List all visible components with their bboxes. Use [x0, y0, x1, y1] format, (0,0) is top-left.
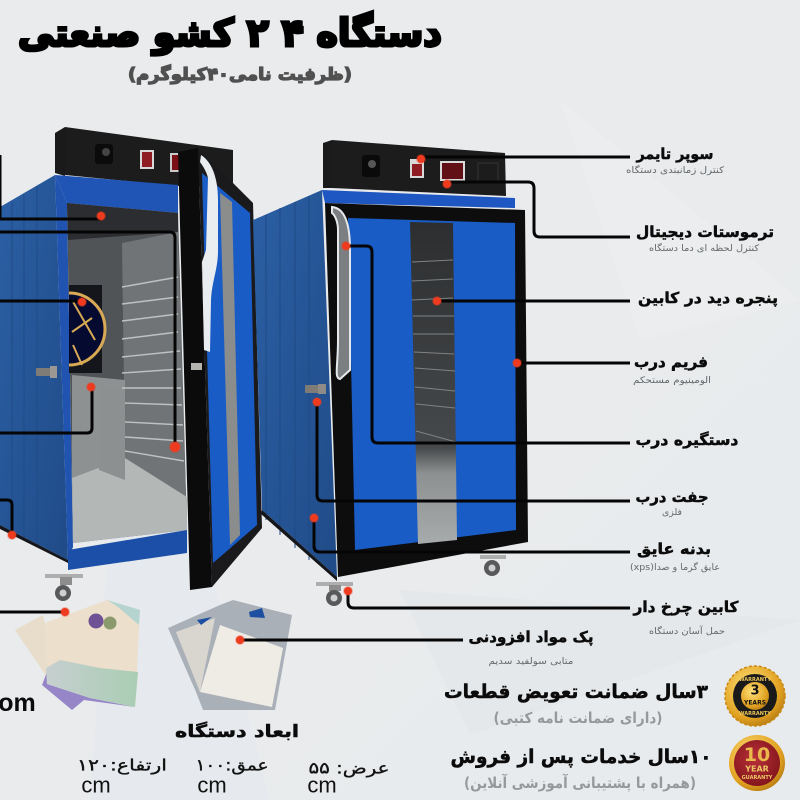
instruction booklets [15, 600, 140, 710]
badge: 3 years warranty: WARRANTY [739, 711, 771, 717]
leader: super timer [417, 155, 630, 163]
right machine: closed door [325, 203, 528, 577]
label: additives pack: پک مواد افزودنی [468, 628, 594, 647]
left machine with open door [0, 127, 262, 601]
label: insulated body [630, 540, 720, 573]
label: door frame: فریم درب [634, 353, 708, 371]
width value: cm [307, 772, 337, 798]
additive chemical sachets [168, 600, 292, 710]
height value: ارتفاع:۱۲۰ [77, 756, 167, 776]
leader: insulated body [310, 514, 630, 552]
right machine: door handle [332, 207, 350, 379]
depth value: cm [197, 772, 227, 798]
warranty text: (دارای ضمانت نامه کتبی) [494, 709, 662, 727]
right machine: blue top strip [322, 190, 515, 208]
depth value: عمق:۱۰۰ [196, 756, 268, 776]
leader: booklets [0, 608, 69, 616]
label: wheeled cabin [632, 598, 739, 637]
left machine: control box [55, 127, 233, 188]
label: wheeled cabin: حمل آسان دستگاه [649, 625, 725, 637]
after-sales service text: (همراه با پشتیبانی آموزشی آنلاین) [464, 774, 696, 793]
right machine: window glass [410, 222, 457, 544]
label: super timer: کنترل زمانبندی دستگاه [626, 164, 725, 176]
height value: cm [81, 772, 111, 798]
title: دستگاه ۲ ۴ کشو صنعتی [18, 11, 442, 55]
left machine: cabin interior [67, 203, 187, 543]
label: digital thermostat [636, 223, 774, 254]
badge: 10 year guaranty [729, 735, 785, 791]
leader: left shelf [0, 383, 95, 433]
right machine: caster wheels [316, 555, 506, 606]
dimensions block [77, 721, 390, 798]
width value: عرض: ۵۵ [308, 758, 390, 778]
label: additives pack [468, 628, 594, 667]
dimensions heading: ابعاد دستگاه [175, 721, 299, 742]
warranty text: ۳سال ضمانت تعویض قطعات [444, 681, 708, 703]
label: door frame [633, 353, 711, 386]
leader: left body [0, 500, 16, 539]
leader: door frame [513, 359, 630, 367]
badge: 3 years warranty [725, 666, 785, 726]
badge: 3 years warranty: YEARS [743, 700, 766, 706]
label: cabin window: پنجره دید در کابین [638, 289, 778, 308]
left machine: open door [178, 148, 262, 590]
badge: 3 years warranty: WARRANTY [739, 677, 771, 683]
leader: cabin window [433, 297, 630, 305]
subtitle: capacity: (ظرفیت نامی۴۰کیلوگرم) [128, 64, 352, 85]
label: door latch: فلزی [662, 508, 682, 518]
label: super timer [626, 145, 725, 176]
label: super timer: سوپر تایمر [636, 145, 714, 164]
left machine: caster wheel [45, 574, 83, 601]
badge: 10 year guaranty: 10 [744, 744, 770, 766]
leader: digital thermostat [443, 180, 630, 237]
label: door frame: الومینیوم مستحکم [633, 376, 711, 386]
leader: wheeled cabin [344, 587, 630, 608]
left machine: side wall [0, 175, 68, 563]
after-sales service text: ۱۰سال خدمات پس از فروش [450, 746, 712, 768]
badge: 10 year guaranty: GUARANTY [742, 775, 773, 781]
leader: door latch [313, 398, 630, 501]
height value [77, 756, 167, 798]
leader: door handle [342, 242, 630, 443]
depth value [196, 756, 268, 798]
label: insulated body: بدنه عایق [637, 540, 711, 558]
leader: left fan [0, 298, 86, 306]
label: door latch [636, 488, 708, 518]
label: door latch: جفت درب [636, 488, 708, 506]
width value [307, 758, 390, 798]
leader lines with marker dots [0, 155, 630, 644]
booklet logo [88, 614, 116, 630]
leader: left door handle [0, 232, 180, 452]
label: insulated body: عایق گرما و صدا(xps) [630, 561, 720, 573]
label: door handle: دستگیره درب [636, 431, 739, 449]
badge: 3 years warranty: 3 [750, 684, 760, 698]
left machine: blue front frame [55, 175, 187, 570]
label: wheeled cabin: کابین چرخ دار [632, 598, 739, 617]
label: digital thermostat: کنترل لحظه ای دما دستگاه [649, 242, 760, 254]
left machine: door handle [200, 155, 218, 352]
leader: left top [0, 155, 105, 220]
right machine with closed door [253, 140, 528, 606]
warranty text [444, 681, 708, 727]
after-sales service text [450, 746, 712, 793]
leader: additives pack [236, 636, 463, 644]
label: additives pack: متابی سولفید سدیم [488, 657, 574, 667]
left machine: fan [69, 285, 105, 373]
right machine: side wall [253, 190, 337, 581]
label: digital thermostat: ترموستات دیجیتال [636, 223, 774, 241]
badge: 10 year guaranty: YEAR [744, 764, 769, 774]
right machine: control box [323, 140, 506, 196]
